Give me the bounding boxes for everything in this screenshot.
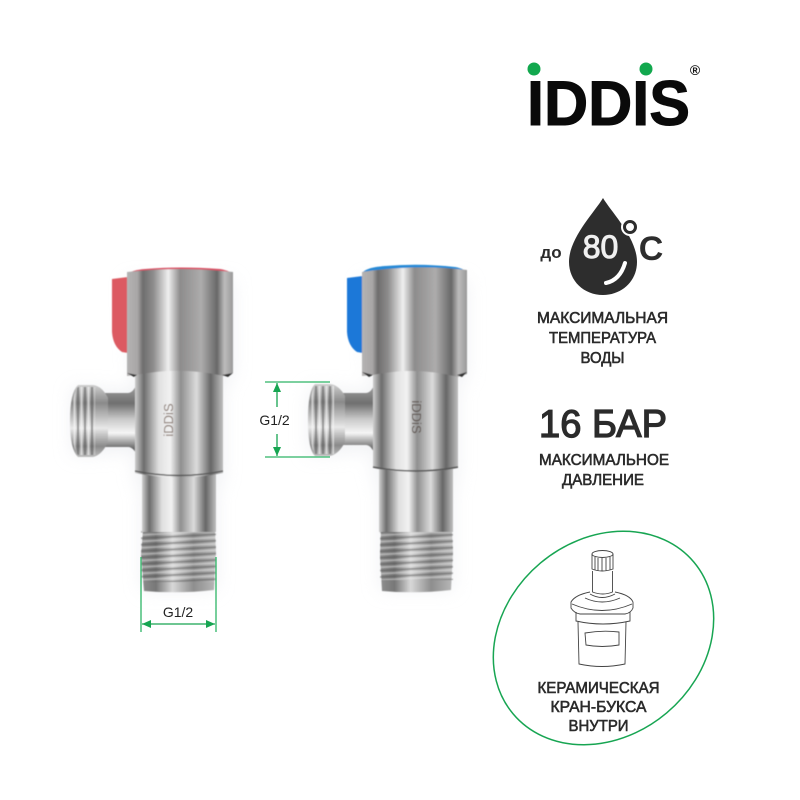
heading: 16 bar: 16 БАР [539, 403, 667, 446]
threaded bottom [380, 527, 453, 592]
narrow lower body [379, 468, 453, 532]
logo: IDDIS: ® [690, 62, 701, 78]
side pipe [338, 380, 376, 458]
main body [373, 368, 458, 472]
main body [135, 368, 223, 478]
product: left valve with red handle [70, 268, 233, 592]
engraved logo: iDDiS [409, 400, 424, 434]
text: max temperature: ТЕМПЕРАТУРА [549, 330, 656, 347]
icon: water drop 80 °C: 80 [583, 229, 618, 265]
text: max pressure [539, 452, 669, 489]
text: ceramic cartridge inside [538, 680, 660, 735]
text: ceramic cartridge inside: ВНУТРИ [568, 718, 628, 735]
engraved logo: iDDiS [161, 403, 176, 437]
icon: water drop 80 °C: C [639, 230, 663, 268]
threaded bottom [141, 527, 216, 592]
text: max temperature [537, 310, 668, 367]
green outline [450, 487, 757, 789]
text: max temperature: ВОДЫ [580, 350, 624, 367]
text: ceramic cartridge inside: КЕРАМИЧЕСКАЯ [538, 680, 660, 697]
text: max pressure: ДАВЛЕНИЕ [562, 472, 644, 489]
icon: water drop 80 °C [540, 198, 663, 295]
dimension: bottom thread G1/2 [141, 557, 216, 632]
side pipe [100, 380, 138, 458]
side nut [308, 384, 345, 456]
steel cap [127, 269, 233, 376]
text: ceramic cartridge inside: КРАН-БУКСА [550, 699, 647, 716]
callout: ceramic cartridge [450, 487, 757, 789]
red cap top [128, 268, 233, 276]
steel cap [362, 267, 467, 377]
narrow lower body [142, 474, 216, 532]
dimension: side outlet G1/2 [259, 382, 330, 457]
text: max temperature: МАКСИМАЛЬНАЯ [537, 310, 668, 327]
icon: cartridge [571, 550, 633, 666]
red handle [112, 277, 128, 353]
product: right valve with blue handle [308, 265, 467, 592]
label: до: до [540, 243, 562, 262]
logo: IDDIS: IDDIS [527, 69, 690, 139]
blue cap top [363, 265, 467, 274]
text: max pressure: МАКСИМАЛЬНОЕ [539, 452, 669, 469]
dimension: bottom thread G1/2: G1/2 [163, 604, 193, 620]
blue handle [347, 276, 363, 353]
dimension: side outlet G1/2: G1/2 [259, 412, 290, 428]
side nut [70, 385, 108, 457]
